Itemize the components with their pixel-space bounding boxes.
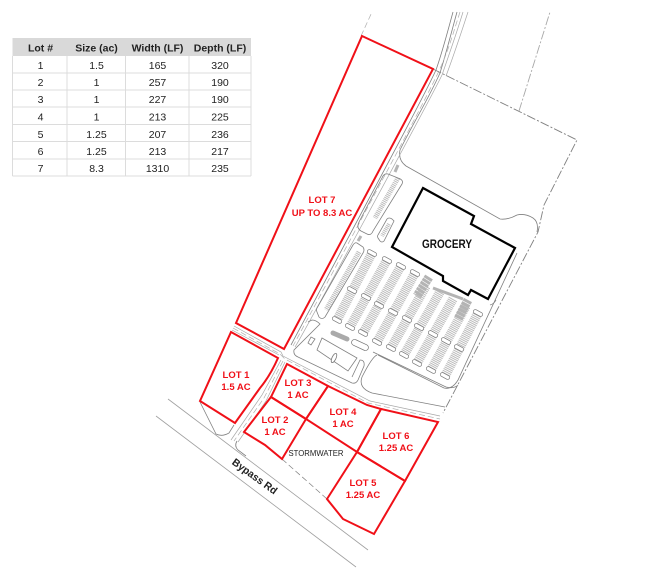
parking curbs [316,174,517,407]
table row: lot 4: 225 [211,112,229,124]
lot 5: 1.25 AC [346,490,380,501]
table row: lot 1: 1 [38,60,44,72]
table row: lot 6: 217 [211,146,229,158]
lot 5: LOT 5 [350,478,377,489]
lot 6: LOT 6 [383,431,409,442]
lot 1 [200,332,278,423]
label: grocery: GROCERY [422,239,472,251]
grocery building outline [392,188,515,299]
lot 6 [357,409,438,481]
table row: lot 7: 1310 [146,163,169,175]
lot 4: 1 AC [332,419,354,430]
table row: lot 4: 4 [38,112,44,124]
table row: lot 4: 213 [149,112,166,124]
outparcel pad [294,320,369,383]
table row: lot 5 [38,129,229,141]
table header row: Lot # [28,42,53,54]
table row: lot 3: 1 [94,94,100,106]
lot 3: 1 AC [287,390,309,401]
lot 5 [327,452,405,534]
table row: lot 5: 1.25 [86,129,107,141]
table row: lot 5: 236 [211,129,229,141]
crosswalks [358,165,468,319]
table header row [12,38,251,56]
lot 4: LOT 4 [330,407,357,418]
table row: lot 3: 3 [38,94,44,106]
lot 1: LOT 1 [223,370,250,381]
table row: lot 6: 213 [149,146,166,158]
lot dimensions table [12,38,251,176]
parking stalls [326,178,478,376]
table header row: Size (ac) [75,42,118,54]
table header row: Depth (LF) [194,42,246,54]
table row: lot 4: 1 [94,112,100,124]
table row: lot 3: 190 [211,94,229,106]
lot 6: 1.25 AC [379,443,413,454]
table row: lot 1: 165 [149,60,166,72]
table row: lot 1 [38,60,229,72]
table row: lot 4 [38,112,229,124]
lot 7: LOT 7 [309,195,335,206]
table row: lot 7: 7 [38,163,44,175]
lot 7: UP TO 8.3 AC [292,208,352,219]
table row: lot 1: 320 [211,60,229,72]
table row: lot 5: 5 [38,129,44,141]
property lines [282,12,577,499]
lot 2: LOT 2 [262,415,288,426]
table row: lot 7: 235 [211,163,229,175]
stormwater label: STORMWATER [288,449,344,458]
table row: lot 7 [38,163,229,175]
table row: lot 2 [38,77,229,89]
parking lot [294,165,517,407]
Bypass Rd edges [156,399,368,567]
table row: lot 2: 190 [211,77,229,89]
table row: lot 2: 2 [38,77,44,89]
table row: lot 5: 207 [149,129,166,141]
road label: Bypass Rd: Bypass Rd [229,456,279,497]
lot 7 [236,36,433,349]
table row: lot 1: 1.5 [89,60,104,72]
lot 2 [244,397,306,459]
cross roads [200,326,440,456]
table header row: Width (LF) [132,42,183,54]
table row: lot 6: 1.25 [86,146,107,158]
lot 3: LOT 3 [285,378,311,389]
site roads and property lines [156,12,577,567]
lot 1: 1.5 AC [221,382,251,393]
north access road [291,12,538,347]
table row: lot 6 [38,146,229,158]
lot 2: 1 AC [264,427,286,438]
table row: lot 7: 8.3 [89,163,104,175]
table row: lot 2: 257 [149,77,166,89]
table row: lot 6: 6 [38,146,44,158]
parking islands [332,249,483,380]
lot 4 [306,386,381,452]
table row: lot 2: 1 [94,77,100,89]
table row: lot 3: 227 [149,94,166,106]
table row: lot 3 [38,94,229,106]
red lot boundaries [200,36,438,534]
lot 3 [271,364,328,419]
